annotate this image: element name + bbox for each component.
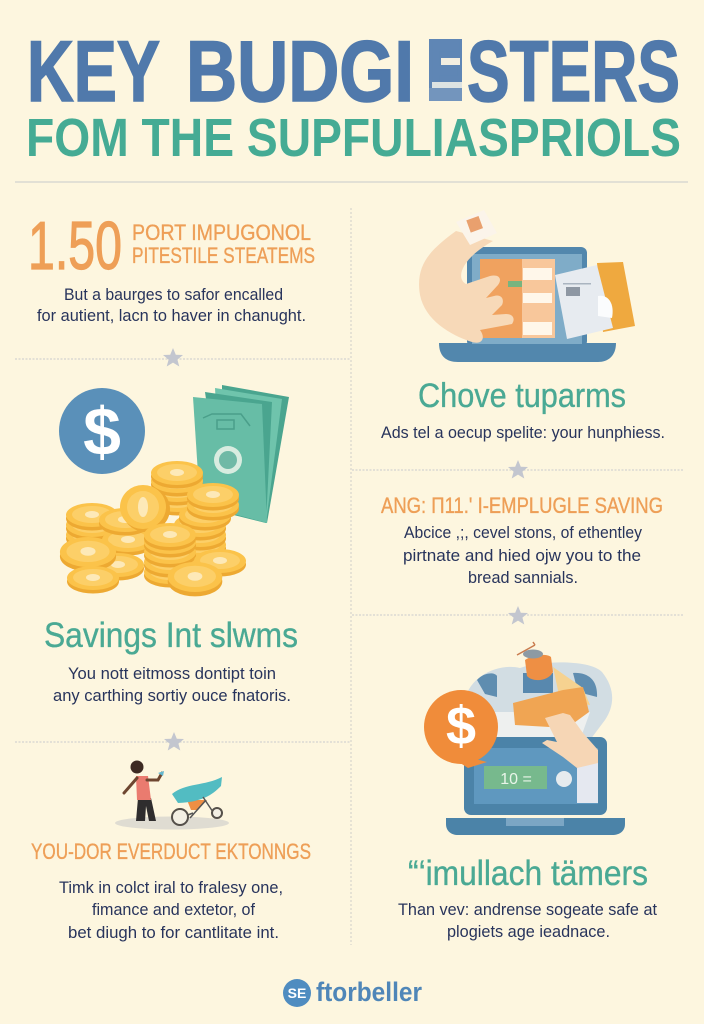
footer logo: SE bbox=[288, 985, 306, 1001]
savings heading: Savings Int slwms bbox=[44, 616, 298, 655]
statistic text: But a baurges to safor encalled bbox=[64, 285, 283, 304]
description: bread sannials. bbox=[468, 568, 578, 587]
panel: employee saving bbox=[381, 493, 663, 587]
statistic heading: PITESTILE STEATEMS bbox=[132, 243, 315, 268]
star divider bbox=[164, 732, 184, 750]
heading: “‘imullach tämers bbox=[408, 854, 648, 893]
icon: dollar circle bbox=[59, 388, 145, 474]
star divider bbox=[508, 606, 528, 624]
statistic heading bbox=[132, 220, 315, 268]
icon: dollar circle: $ bbox=[83, 394, 121, 470]
panel: multiple timers bbox=[398, 642, 657, 941]
everyday heading: YOU-DOR EVERDUCT EKTONNGS bbox=[31, 839, 311, 864]
everyday text: Timk in colct iral to fralesy one, bbox=[59, 878, 283, 897]
icon: gold coins bbox=[60, 461, 246, 596]
icon: child with stroller bbox=[115, 760, 229, 830]
statistic text bbox=[37, 285, 306, 325]
illustration: laptop with dollar bubble and envelope bbox=[424, 642, 625, 835]
panel: savings bbox=[44, 385, 298, 705]
description: Ads tel a oecup spelite: your hunphiess. bbox=[381, 423, 665, 442]
illustration: laptop with dollar bubble and envelope: 10 = bbox=[500, 771, 532, 788]
star divider bbox=[508, 460, 528, 478]
panel: statistic bbox=[28, 208, 315, 325]
illustration: laptop with dollar bubble and envelope: $ bbox=[446, 696, 476, 756]
description: Abcice ,;, cevel stons, of ethentley bbox=[404, 523, 642, 542]
title: BUDGI bbox=[186, 24, 414, 120]
footer logo: ftorbeller bbox=[316, 977, 422, 1007]
icon: green banknotes bbox=[193, 385, 289, 523]
description bbox=[398, 900, 657, 941]
statistic text: for autient, lacn to haver in chanught. bbox=[37, 306, 306, 325]
panel: choose programs bbox=[381, 210, 665, 442]
savings text: You nott eitmoss dontipt toin bbox=[68, 664, 276, 683]
heading: Chove tuparms bbox=[418, 377, 626, 415]
title: E bbox=[429, 24, 462, 120]
statistic heading: PORT IMPUGONOL bbox=[132, 220, 311, 245]
description: plogiets age ieadnace. bbox=[447, 922, 610, 941]
everyday text: bet diugh to for cantlitate int. bbox=[68, 923, 279, 942]
title: KEY bbox=[27, 24, 160, 120]
description: Than vev: andrense sogeate safe at bbox=[398, 900, 657, 919]
panel: everyday bbox=[31, 760, 311, 942]
everyday text: fimance and extetor, of bbox=[92, 900, 255, 919]
big number: 1.50 bbox=[28, 208, 122, 284]
star divider bbox=[163, 348, 183, 366]
description: pirtnate and hied ojw you to the bbox=[403, 546, 641, 565]
savings text: any carthing sortiy ouce fnatoris. bbox=[53, 686, 291, 705]
everyday text bbox=[59, 878, 283, 942]
title bbox=[26, 24, 681, 168]
savings text bbox=[53, 664, 291, 705]
illustration: laptop with hand and documents bbox=[419, 210, 635, 362]
description bbox=[403, 523, 642, 587]
